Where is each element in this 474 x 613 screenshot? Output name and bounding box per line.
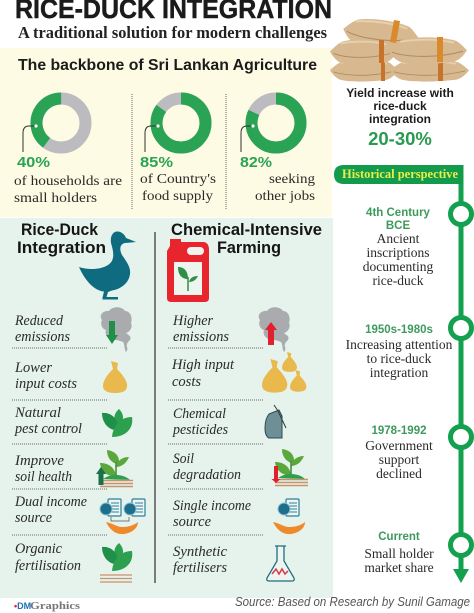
text: yield increase: rice-duck — [373, 99, 427, 113]
text: other jobs: other jobs — [255, 189, 315, 204]
entry: 4th century BCE: inscriptions — [366, 245, 430, 260]
entry: 1978-1992: declined — [376, 466, 422, 481]
stat: 82%: 82% — [240, 154, 272, 171]
row: improve soil health — [14, 453, 72, 485]
icon: flask — [267, 546, 294, 581]
text: households — [14, 174, 122, 206]
entry: 4th century BCE: documenting — [363, 259, 433, 274]
row: soil degradation: degradation — [173, 467, 241, 483]
heading: rice-duck integration: Rice-Duck — [21, 221, 99, 239]
entry: 1950s-1980s: to rice-duck — [367, 351, 432, 366]
banner: historical perspective: Historical perspective — [342, 167, 458, 181]
text: yield increase: integration — [369, 112, 431, 126]
entry: 1978-1992: 1978-1992 — [372, 425, 426, 437]
row: chemical pesticides — [172, 406, 228, 438]
heading: backbone: The backbone of Sri Lankan Agriculture — [18, 57, 317, 74]
entry: current: Current — [378, 531, 420, 543]
icon: dual income — [100, 499, 145, 534]
entry: current — [364, 531, 434, 575]
row: chemical pesticides: Chemical — [173, 406, 226, 422]
row: natural pest control: pest control — [14, 421, 82, 437]
entry: current: market share — [364, 560, 434, 575]
icon: sprayer — [265, 405, 286, 438]
icon: sprout with down arrow — [272, 449, 308, 486]
row: single income source — [173, 498, 251, 530]
row: reduced emissions: Reduced — [14, 313, 63, 329]
icon: money bag — [103, 361, 127, 393]
text: food supply — [140, 172, 216, 204]
icon: red jug — [167, 239, 209, 302]
credit: DM Graphics — [14, 600, 81, 612]
row: single income source: source — [173, 514, 211, 530]
donut: 40% households — [23, 89, 95, 157]
heading: chemical-intensive farming: Farming — [217, 239, 281, 257]
marker: 1950s — [450, 318, 472, 338]
row: reduced emissions: emissions — [15, 329, 70, 345]
entry: 1950s-1980s — [346, 324, 453, 380]
subtitle: A traditional solution for modern challenges — [18, 23, 328, 42]
entry: 1978-1992 — [365, 425, 433, 481]
entry: current: Small holder — [364, 546, 434, 561]
row: synthetic fertilisers — [173, 544, 227, 576]
credit: DM Graphics: •DM — [14, 601, 31, 611]
entry: 1950s-1980s: 1950s-1980s — [365, 324, 433, 336]
entry: 4th century BCE: BCE — [386, 220, 410, 232]
row: organic fertilisation: Organic — [15, 541, 62, 557]
row: dual income source: source — [15, 510, 52, 526]
text: food supply: food supply — [142, 189, 213, 204]
row: lower input costs — [14, 360, 77, 392]
entry: 4th century BCE: rice-duck — [373, 273, 424, 288]
icon: three money bags — [262, 352, 306, 393]
row: organic fertilisation — [15, 541, 81, 574]
row: synthetic fertilisers: fertilisers — [173, 560, 227, 576]
row: high input costs: costs — [172, 374, 201, 390]
banner: historical perspective — [334, 165, 463, 184]
heading: chemical-intensive farming: Chemical-Intensive — [171, 221, 322, 239]
entry: 4th century BCE: 4th Century — [366, 207, 431, 219]
text: other jobs — [255, 172, 315, 204]
icon: organic leaves — [100, 543, 132, 582]
row: improve soil health: soil health — [15, 469, 72, 485]
row: high input costs — [171, 357, 235, 390]
text: other jobs: seeking — [269, 172, 315, 187]
marker: 1978 — [450, 426, 472, 448]
icon: duck — [79, 231, 136, 300]
entry: 4th century BCE: Ancient — [377, 231, 420, 246]
heading: rice-duck integration — [17, 221, 106, 257]
row: organic fertilisation: fertilisation — [15, 558, 81, 574]
panel: comparison — [0, 218, 333, 598]
credit: DM Graphics: Graphics — [30, 600, 81, 612]
row: soil degradation: Soil — [173, 451, 194, 467]
icon: single income — [273, 499, 305, 534]
row: lower input costs: input costs — [15, 376, 77, 392]
entry: 1950s-1980s: Increasing attention — [346, 337, 453, 352]
row: natural pest control — [14, 405, 82, 437]
row: higher emissions: Higher — [172, 313, 213, 329]
icon: smoke with down arrow — [101, 307, 132, 352]
marker: current — [450, 534, 472, 556]
stat: 40%: 40% — [17, 154, 50, 171]
row: reduced emissions — [14, 313, 70, 345]
row: improve soil health: Improve — [14, 453, 64, 469]
row: chemical pesticides: pesticides — [172, 422, 228, 438]
row: lower input costs: Lower — [14, 360, 52, 376]
timeline — [334, 165, 472, 583]
icon: smoke with up arrow — [259, 307, 290, 352]
stat: 85%: 85% — [140, 154, 173, 171]
entry: 4th century BCE — [363, 207, 433, 288]
text: yield increase: Yield increase with — [346, 86, 454, 100]
row: natural pest control: Natural — [14, 405, 61, 421]
entry: 1950s-1980s: integration — [370, 365, 428, 380]
row: synthetic fertilisers: Synthetic — [173, 544, 227, 560]
arrow head — [453, 569, 469, 583]
row: high input costs: High input — [171, 357, 235, 373]
heading: chemical-intensive farming — [171, 221, 322, 257]
row: soil degradation — [173, 451, 241, 483]
text: yield increase — [346, 86, 454, 126]
donut: 85% food supply — [145, 98, 206, 152]
donut: 82% other jobs — [241, 98, 300, 152]
row: higher emissions — [172, 313, 229, 345]
row: higher emissions: emissions — [173, 329, 229, 345]
icon: leaves — [102, 409, 132, 437]
icon: rice sacks — [330, 15, 469, 82]
marker: 4th century — [450, 204, 472, 224]
row: single income source: Single income — [173, 498, 251, 514]
row: dual income source: Dual income — [14, 494, 87, 510]
text: households: small holders — [14, 191, 97, 206]
entry: 1978-1992: support — [379, 452, 419, 467]
entry: 1978-1992: Government — [365, 438, 433, 453]
stat: 20-30%: 20-30% — [368, 128, 432, 149]
row: dual income source — [14, 494, 87, 526]
text: households: of households are — [14, 174, 122, 189]
icon: sprout with up arrow — [96, 450, 133, 486]
text: food supply: of Country's — [140, 172, 216, 187]
panel: backbone of Sri Lankan agriculture — [0, 48, 332, 217]
heading: rice-duck integration: Integration — [17, 239, 106, 257]
